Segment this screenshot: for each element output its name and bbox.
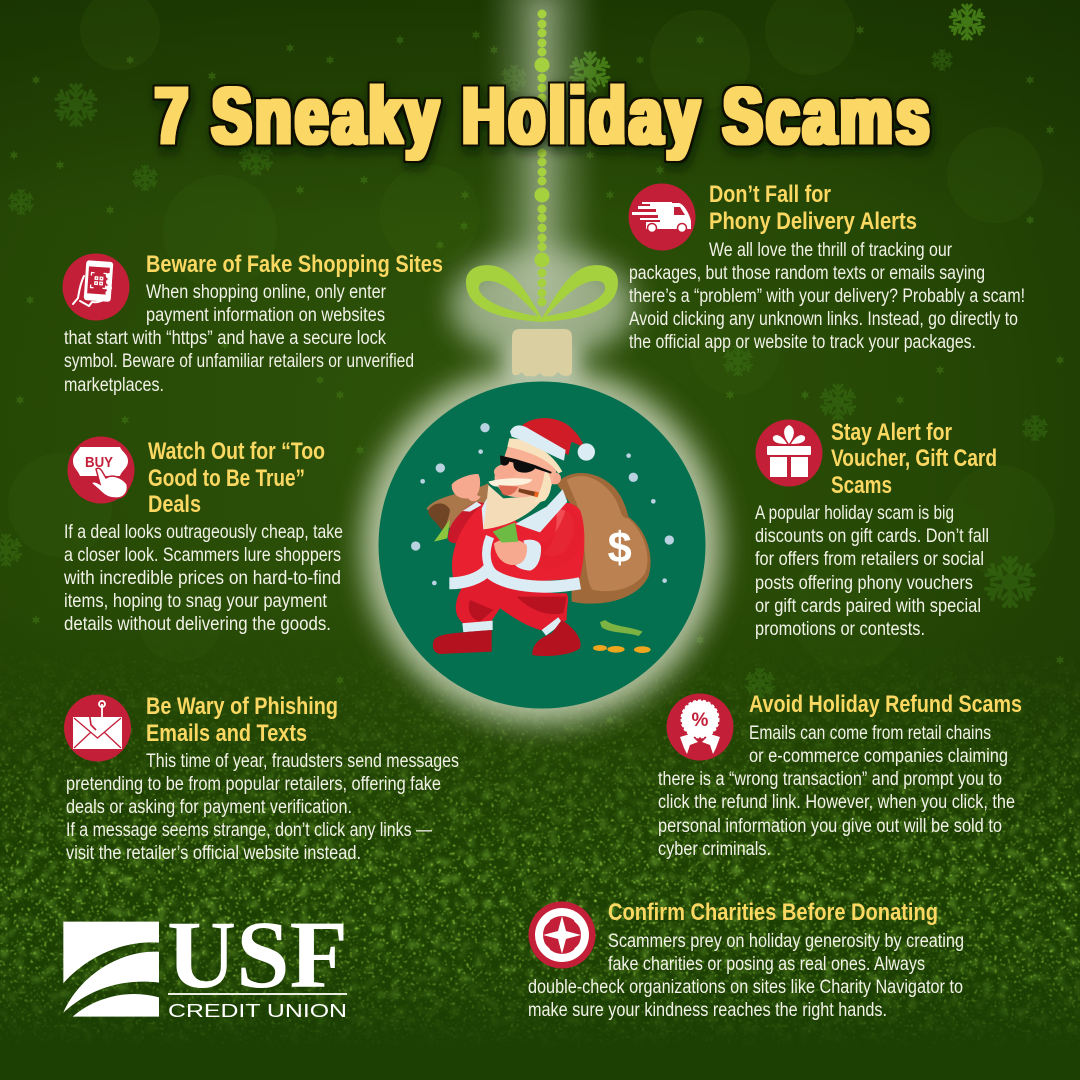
body text: that start with “https” and have a secure lock: [64, 328, 386, 349]
heading: [709, 181, 917, 235]
body text: [63, 522, 343, 635]
heading: [831, 419, 997, 499]
title: 7 Sneaky Holiday Scams: [155, 70, 929, 160]
body text: packages, but those random texts or emails saying: [629, 263, 985, 284]
panel: Phishing Emails and Texts: [64, 693, 459, 864]
ornament cap: [512, 329, 572, 377]
heading: Confirm Charities Before Donating: [608, 899, 938, 926]
body text: A popular holiday scam is big: [755, 503, 954, 524]
body text: [528, 931, 964, 1021]
icon: phone with QR code: [62, 254, 130, 320]
body text: symbol. Beware of unfamiliar retailers or unverified: [64, 351, 414, 372]
ornament hanging string of beads: [534, 10, 550, 306]
body text: payment information on websites: [146, 305, 385, 326]
heading: Be Wary of Phishing: [146, 693, 338, 720]
heading: Good to Be True”: [148, 465, 305, 492]
body text: If a deal looks outrageously cheap, take: [64, 522, 343, 543]
body text: items, hoping to snag your payment: [64, 591, 328, 612]
body text: [64, 282, 414, 396]
body text: fake charities or posing as real ones. Always: [608, 954, 925, 975]
body text: When shopping online, only enter: [146, 282, 387, 303]
panel: Voucher, Gift Card Scams: [755, 419, 997, 640]
panel: Phony Delivery Alerts: [628, 181, 1025, 353]
heading: [146, 693, 338, 747]
icon: percent badge: %: [692, 710, 709, 731]
heading: Stay Alert for: [831, 419, 952, 446]
panel: Confirm Charities: [528, 899, 964, 1021]
icon: gift box: [756, 420, 822, 486]
heading: Don’t Fall for: [709, 181, 831, 208]
body text: [629, 240, 1025, 353]
body text: [755, 503, 989, 640]
heading: [148, 438, 325, 518]
body text: If a message seems strange, don’t click any links —: [66, 820, 432, 841]
heading: Beware of Fake Shopping Sites: [146, 251, 443, 278]
panel: Too Good to Be True Deals: [63, 436, 343, 635]
body text: the official app or website to track your packages.: [629, 332, 976, 353]
body text: with incredible prices on hard-to-find: [63, 568, 341, 589]
illustration: Santa with money sack: [411, 418, 674, 656]
icon: envelope with hook: [64, 694, 131, 762]
body text: there is a “wrong transaction” and prompt you to: [658, 769, 1002, 790]
icon: charity star emblem: [528, 902, 596, 968]
ornament glow: [362, 0, 722, 725]
body text: [658, 723, 1015, 860]
icon: delivery van: [628, 184, 696, 250]
body text: details without delivering the goods.: [64, 614, 331, 635]
panel: Holiday Refund Scams: [658, 691, 1022, 860]
heading: Watch Out for “Too: [148, 438, 325, 465]
body text: click the refund link. However, when you click, the: [658, 792, 1015, 813]
body text: discounts on gift cards. Don’t fall: [755, 526, 989, 547]
body text: personal information you give out will be sold to: [658, 816, 1002, 837]
body text: posts offering phony vouchers: [755, 573, 973, 594]
body text: pretending to be from popular retailers, offering fake: [66, 774, 441, 795]
logo wordmark: USF: [167, 901, 348, 1008]
body text: marketplaces.: [64, 375, 164, 396]
body text: or e-commerce companies claiming: [749, 746, 1008, 767]
panel: Beware of Fake Shopping Sites: [62, 251, 443, 396]
body text: Scammers prey on holiday generosity by creating: [608, 931, 964, 952]
icon: BUY button with pointing hand: [68, 436, 134, 504]
body text: for offers from retailers or social: [755, 549, 984, 570]
logo: USF Credit Union: [63, 901, 348, 1021]
body text: We all love the thrill of tracking our: [709, 240, 953, 261]
body text: a closer look. Scammers lure shoppers: [64, 545, 341, 566]
heading: Avoid Holiday Refund Scams: [749, 691, 1022, 718]
body text: or gift cards paired with special: [755, 596, 981, 617]
body text: promotions or contests.: [755, 619, 925, 640]
body text: visit the retailer’s official website instead.: [66, 843, 361, 864]
body text: deals or asking for payment verification.: [66, 797, 352, 818]
heading: Voucher, Gift Card: [831, 445, 997, 472]
illustration: Santa with money sack: $: [608, 525, 632, 573]
collar: [482, 498, 491, 529]
logo tagline: CREDIT UNION: [168, 1000, 347, 1021]
heading: Deals: [148, 491, 201, 518]
body text: Emails can come from retail chains: [749, 723, 991, 744]
logo mark: [63, 922, 159, 1017]
ornament ball with Santa: [378, 382, 706, 708]
body text: This time of year, fraudsters send messages: [146, 751, 459, 772]
body text: [66, 751, 459, 864]
heading: Phony Delivery Alerts: [709, 208, 917, 235]
icon: percent badge: [666, 694, 734, 760]
body text: cyber criminals.: [658, 839, 771, 860]
heading: Emails and Texts: [146, 720, 307, 747]
body text: double-check organizations on sites like Charity Navigator to: [528, 977, 963, 998]
body text: make sure your kindness reaches the right hands.: [528, 1000, 887, 1021]
heading: Scams: [831, 472, 892, 499]
ornament bow: [466, 265, 618, 322]
icon: BUY button with pointing hand: BUY: [85, 454, 113, 471]
